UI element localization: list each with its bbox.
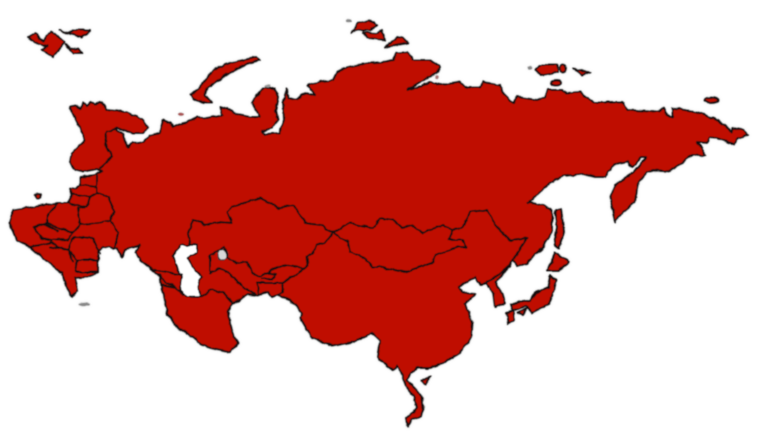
Novaya Zemlya (190, 57, 260, 103)
Caucasus (140, 260, 182, 275)
Russia China east (452, 210, 527, 282)
Caspian Sea (173, 245, 202, 297)
Sakhalin (554, 209, 564, 248)
Shikoku (517, 308, 528, 315)
New Siberian Islands (535, 64, 590, 86)
Severnaya Zemlya (352, 20, 408, 48)
Kazakhstan east (260, 233, 333, 277)
country borders (30, 129, 527, 304)
Tajikistan Kyrgyzstan (257, 283, 283, 295)
Kyushu (507, 311, 514, 324)
Kazakhstan north (188, 198, 333, 245)
Hainan (421, 376, 431, 384)
Wrangel Island (704, 98, 718, 102)
Hokkaido (547, 252, 569, 271)
Honshu (511, 276, 556, 313)
Aral Sea (218, 250, 228, 260)
small islands (35, 19, 532, 306)
Iran north (200, 290, 233, 304)
Kazakhstan south (210, 247, 260, 277)
Mongolia (333, 218, 467, 272)
Turkmenistan Uzbekistan (210, 268, 257, 295)
Svalbard (28, 30, 90, 57)
